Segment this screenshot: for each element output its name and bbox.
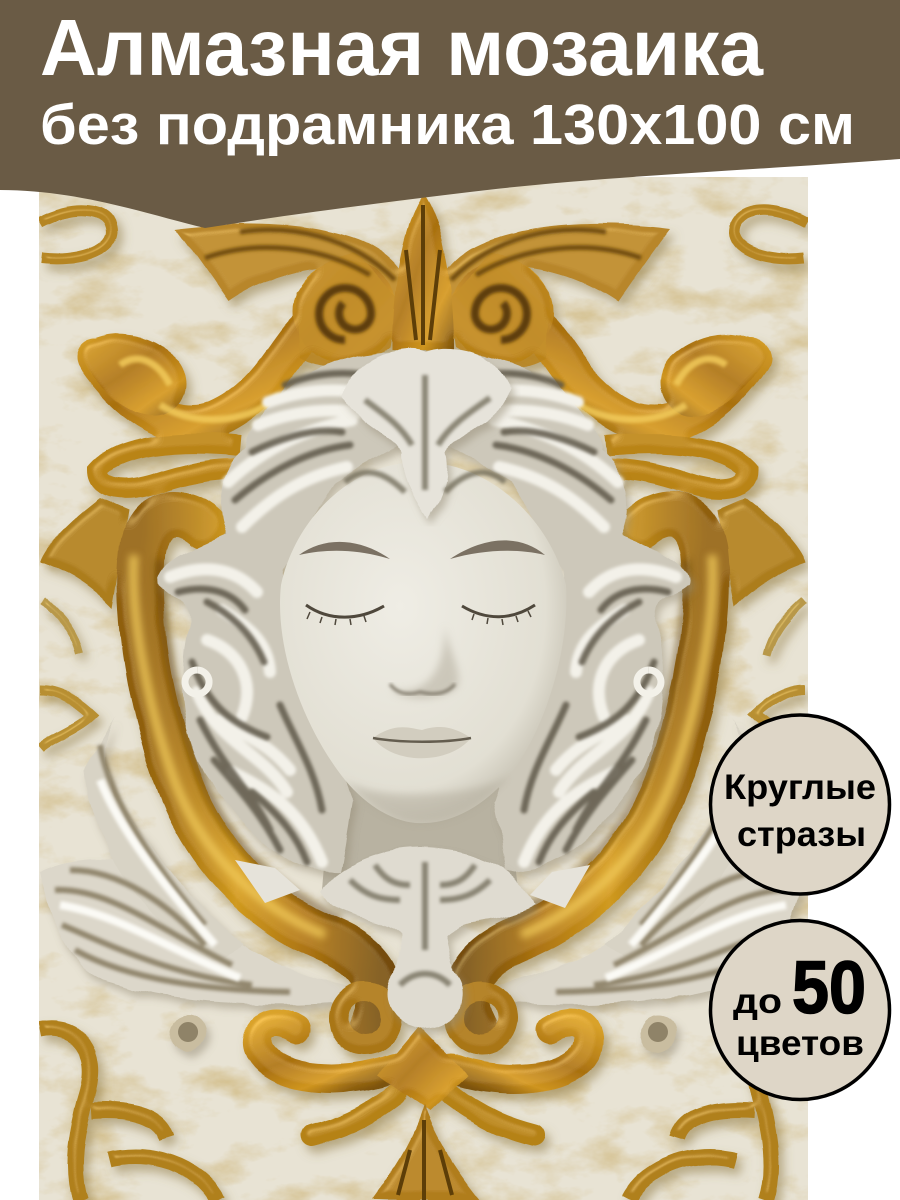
title: Алмазная мозаика — [40, 3, 763, 92]
badge: up to 50 colors — [710, 920, 890, 1100]
artwork background plaster — [39, 177, 808, 1200]
hair — [157, 352, 689, 872]
neck — [322, 782, 518, 890]
collar bouquet — [235, 848, 590, 1029]
badge: up to 50 colors: до — [733, 982, 782, 1021]
badge: up to 50 colors: 50 — [792, 946, 866, 1029]
badge: round rhinestones: стразы — [737, 815, 866, 854]
header banner — [0, 0, 900, 228]
face — [280, 462, 566, 823]
nose — [396, 635, 461, 702]
lips — [373, 727, 471, 758]
brows — [299, 542, 390, 559]
badge: round rhinestones: Круглые — [724, 768, 876, 807]
gold fleuron lines — [398, 205, 452, 1200]
badge: up to 50 colors: цветов — [736, 1024, 864, 1063]
badge: round rhinestones — [710, 715, 890, 894]
ornament: mirrored gold frame — [40, 195, 806, 1200]
panel: diamond mosaic artwork — [39, 177, 808, 1200]
subtitle: без подрамника 130х100 см — [40, 93, 855, 157]
eyes — [306, 605, 384, 617]
central forelock — [342, 348, 512, 518]
plaster wings — [40, 715, 806, 1051]
